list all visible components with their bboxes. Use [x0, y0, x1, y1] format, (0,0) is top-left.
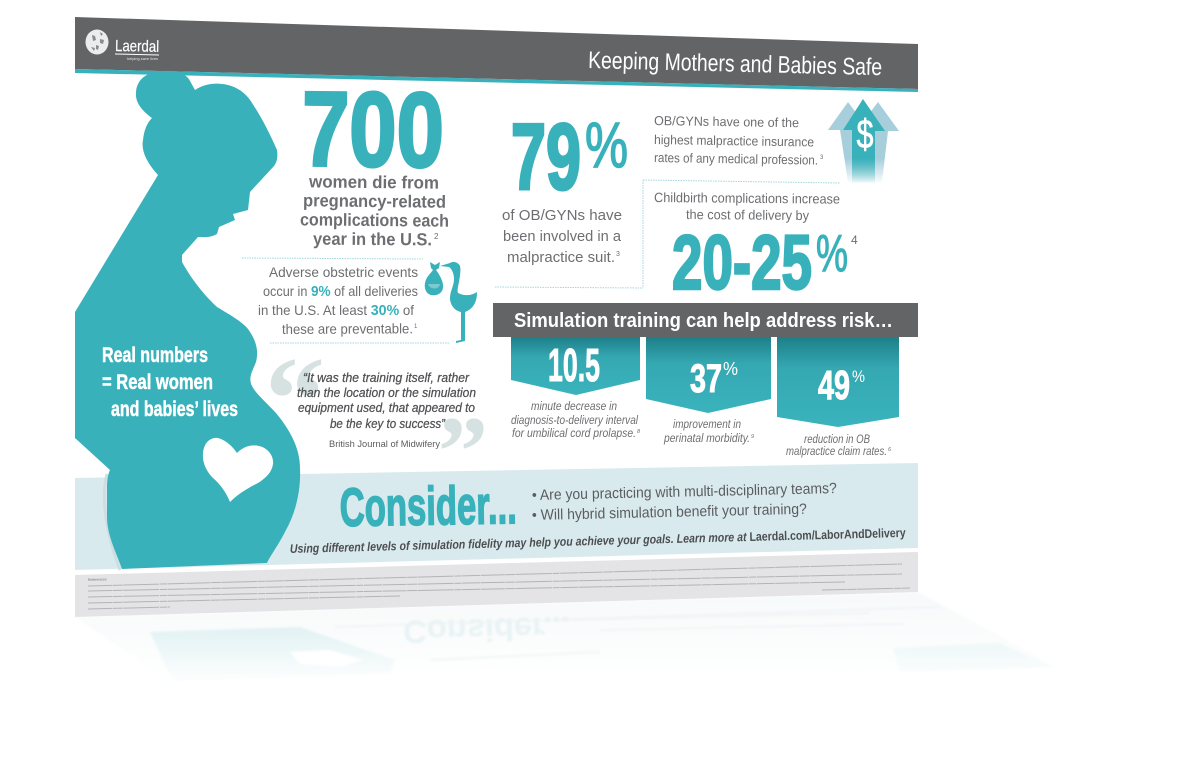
- silhouette caption: = Real women: [102, 371, 213, 394]
- quote text: equipment used, that appeared to: [298, 401, 475, 415]
- text: adverse obstetric events: occur in 9% of all deliveries: [263, 283, 418, 300]
- caption: 49%: reduction in OB: [804, 434, 870, 446]
- caption: 49%: [786, 434, 892, 458]
- silhouette caption: [102, 344, 238, 421]
- panel: poster background: [75, 17, 918, 617]
- opening quote mark: “: [265, 332, 325, 465]
- stat: cost of delivery: 20-25: [672, 220, 812, 306]
- banner: 49%: [777, 337, 899, 427]
- consider bullets: • Are you practicing with multi-disciplinary teams?: [532, 480, 837, 504]
- quote block: [265, 332, 488, 507]
- references lines: [88, 564, 910, 609]
- stat caption: of OB/GYNs have: [502, 208, 622, 224]
- quote source: British Journal of Midwifery: [329, 439, 440, 450]
- silhouette band shadow: [104, 474, 120, 570]
- consider bullets: [532, 480, 837, 524]
- text: adverse obstetric events: these are preventable.: [282, 320, 413, 337]
- text: malpractice insurance: OB/GYNs have one of the: [654, 113, 799, 130]
- caption: 37%: 9: [751, 434, 754, 440]
- heading bar: [493, 303, 918, 337]
- stat caption: 3: [616, 251, 620, 258]
- caption: 10.5: 8: [637, 429, 641, 435]
- stat caption: malpractice suit.: [507, 250, 615, 266]
- stat caption: year in the U.S.: [313, 229, 432, 249]
- caption: 10.5: [511, 401, 641, 440]
- caption: 10.5: for umbilical cord prolapse.: [512, 428, 636, 440]
- reflection of the poster: Consider...: [403, 610, 571, 650]
- quote text: than the location or the simulation: [297, 386, 476, 400]
- caption: 49%: malpractice claim rates.: [786, 446, 887, 458]
- stat: cost of delivery: %: [816, 225, 848, 283]
- stat caption: women die from: [308, 171, 439, 193]
- title: Keeping Mothers and Babies Safe: [588, 47, 882, 81]
- stat: 700 women: 700: [301, 70, 445, 190]
- banner: 10.5: [511, 337, 640, 395]
- logo: Laerdal: [115, 38, 159, 56]
- stat: 79%: %: [585, 109, 628, 181]
- stat: 79%: 79: [511, 104, 581, 209]
- banner: 37%: %: [723, 359, 738, 379]
- consider call to action: Using different levels of simulation fidelity may help you achieve your goals. Learn more at Laerdal.com/LaborAndDelivery: [290, 526, 906, 556]
- stat intro: the cost of delivery by: [686, 207, 809, 223]
- text: malpractice insurance: rates of any medical profession.: [654, 150, 818, 168]
- text: adverse obstetric events: 1: [414, 324, 418, 330]
- stat caption: [300, 171, 449, 249]
- reflection of the poster: [75, 592, 1060, 690]
- quote text: be the key to success”: [330, 417, 446, 431]
- divider: dotted rules: [242, 180, 840, 343]
- stat caption: [502, 208, 622, 266]
- banner: 10.5: 10.5: [548, 339, 600, 391]
- icon: stork: [425, 262, 477, 343]
- caption: 37%: improvement in: [673, 419, 741, 431]
- text: malpractice insurance: [654, 113, 824, 168]
- caption: 49%: 6: [888, 447, 892, 453]
- stat caption: pregnancy-related: [303, 190, 446, 212]
- stat intro: Childbirth complications increase: [654, 190, 840, 207]
- text: malpractice insurance: highest malpractice insurance: [654, 132, 814, 150]
- logo: helping save lives: [127, 56, 158, 61]
- icon: rising dollar arrows: [828, 99, 899, 184]
- references heading: References:: [88, 577, 107, 582]
- stat caption: complications each: [300, 209, 449, 231]
- logo: [86, 30, 159, 61]
- panel: references footer: [75, 552, 918, 617]
- caption: 10.5: minute decrease in: [531, 401, 617, 413]
- stat intro: [654, 190, 840, 223]
- stat caption: been involved in a: [503, 229, 622, 245]
- caption: 37%: perinatal morbidity.: [663, 433, 750, 445]
- mother silhouette: [75, 71, 300, 569]
- panel: simulation training: [493, 303, 918, 458]
- icon: rising dollar arrows: $: [856, 111, 874, 157]
- silhouette caption: and babies’ lives: [111, 398, 238, 421]
- stat: cost of delivery: [654, 190, 858, 306]
- caption: 37%: [663, 419, 754, 445]
- banner: 37%: 37: [690, 357, 722, 401]
- stat: 700 women: [300, 70, 449, 249]
- silhouette caption: Real numbers: [102, 344, 208, 367]
- header bar: [75, 17, 918, 92]
- quote text: “It was the training itself, rather: [303, 371, 470, 385]
- consider callout: [290, 475, 906, 556]
- icon: heart: [203, 438, 273, 502]
- consider bullets: • Will hybrid simulation benefit your training?: [532, 501, 807, 524]
- consider heading: Consider...: [339, 475, 517, 538]
- caption: 10.5: diagnosis-to-delivery interval: [511, 415, 638, 427]
- stat: 79%: [502, 104, 628, 266]
- stat: cost of delivery: 4: [851, 233, 858, 247]
- quote text: [297, 371, 476, 431]
- heading bar: Simulation training can help address risk…: [514, 310, 893, 332]
- stat caption: 2: [434, 232, 439, 241]
- text: adverse obstetric events: Adverse obstetric events: [269, 264, 418, 280]
- text: malpractice insurance: 3: [820, 155, 824, 161]
- closing quote mark: ”: [438, 396, 488, 507]
- banner: 49%: %: [852, 367, 865, 386]
- text: adverse obstetric events: in the U.S. At least 30% of: [258, 302, 414, 319]
- banner: 37%: [646, 337, 771, 413]
- text: adverse obstetric events: [258, 264, 418, 337]
- panel: consider band: [75, 463, 918, 570]
- banner: 49%: 49: [818, 362, 850, 408]
